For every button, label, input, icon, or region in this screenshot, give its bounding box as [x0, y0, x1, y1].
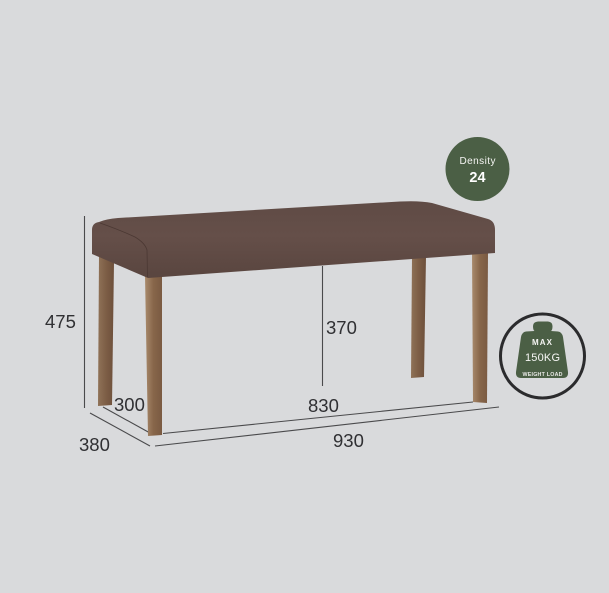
label: 475: 475 [45, 311, 76, 332]
seam [100, 223, 148, 277]
density badge: Density [460, 156, 496, 167]
back right leg [411, 256, 426, 378]
label: 830: 830 [308, 395, 339, 416]
density badge [446, 137, 510, 201]
front left leg [145, 276, 162, 436]
label: 370: 370 [326, 317, 357, 338]
density badge: 24 [469, 170, 486, 186]
weight load badge [500, 314, 584, 398]
label: 380: 380 [79, 434, 110, 455]
back left leg [98, 255, 114, 406]
label: 930: 930 [333, 430, 364, 451]
dimension lines [84, 216, 499, 446]
weight load badge: 150KG [525, 352, 560, 364]
bench [92, 201, 495, 436]
front right leg [472, 252, 488, 403]
dimension labels [45, 311, 364, 455]
label: 300: 300 [114, 394, 145, 415]
weight load badge: MAX [532, 338, 553, 347]
weight load badge: WEIGHT LOAD [522, 372, 563, 378]
icon: weight [516, 322, 568, 378]
seat cushion [92, 201, 495, 278]
